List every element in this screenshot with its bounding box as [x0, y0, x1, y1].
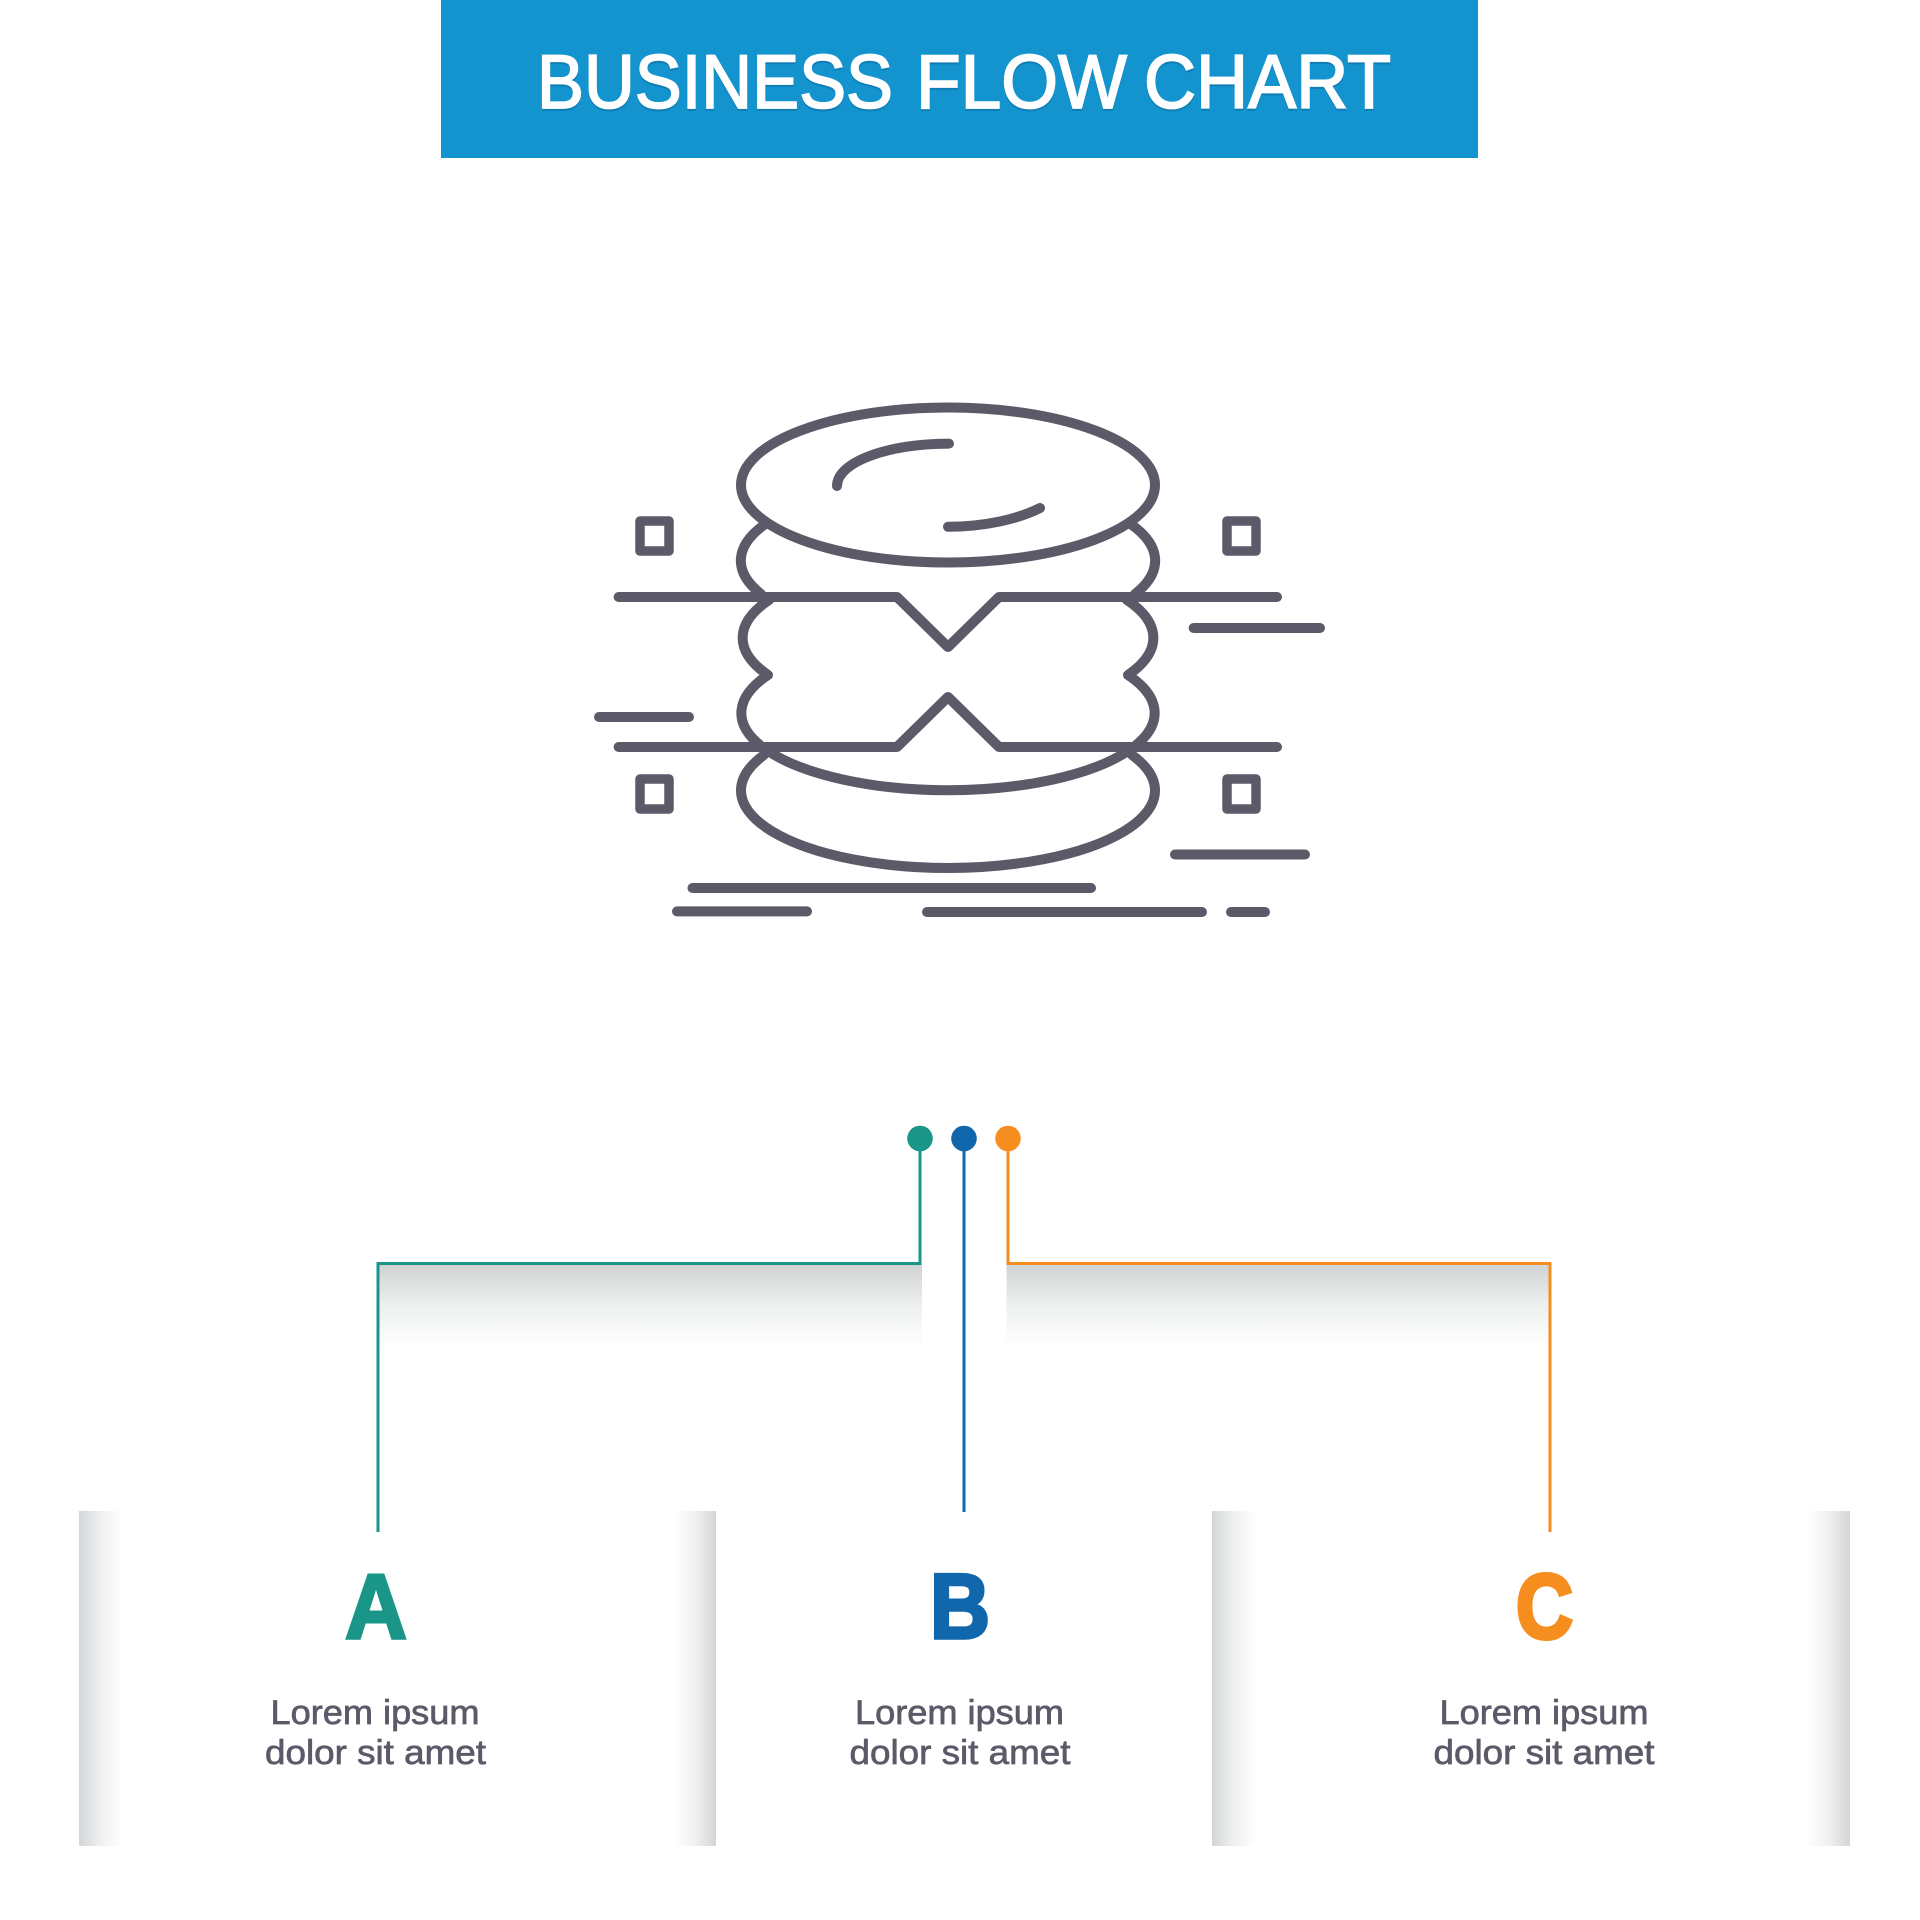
- letter B: B: [930, 1556, 990, 1658]
- speed lines: [599, 628, 1320, 912]
- icon: data stack: [599, 408, 1320, 912]
- title banner: [441, 0, 1478, 158]
- text: A: [265, 1694, 487, 1772]
- text: A: Lorem ipsum: [270, 1694, 480, 1732]
- text: C: [1434, 1694, 1655, 1772]
- connector: B: [951, 1126, 977, 1512]
- small squares: [640, 521, 1256, 809]
- title: BUSINESS: [537, 40, 893, 125]
- text: C: Lorem ipsum: [1440, 1694, 1648, 1732]
- connector gradient bands: [378, 1265, 1550, 1347]
- text: B: Lorem ipsum: [855, 1694, 1064, 1732]
- top disk: [741, 408, 1155, 562]
- panel: A: [79, 1511, 716, 1846]
- text: B: [850, 1694, 1071, 1772]
- title: FLOW: [916, 40, 1127, 125]
- letter C: C: [1516, 1556, 1573, 1658]
- title: CHART: [1144, 40, 1391, 125]
- bottom disk: [741, 751, 1155, 868]
- panel: C: [1212, 1511, 1850, 1846]
- title: [537, 40, 1391, 125]
- connector: A: [378, 1126, 933, 1532]
- panel: B: [850, 1556, 1071, 1772]
- stack side arcs: [741, 525, 1155, 746]
- connector: C: [995, 1126, 1550, 1532]
- letter A: A: [345, 1556, 407, 1658]
- disk highlights: [837, 444, 1040, 527]
- chevron lines: [619, 597, 1277, 747]
- text: C: dolor sit amet: [1434, 1734, 1655, 1772]
- text: A: dolor sit amet: [265, 1734, 487, 1772]
- text: B: dolor sit amet: [850, 1734, 1071, 1772]
